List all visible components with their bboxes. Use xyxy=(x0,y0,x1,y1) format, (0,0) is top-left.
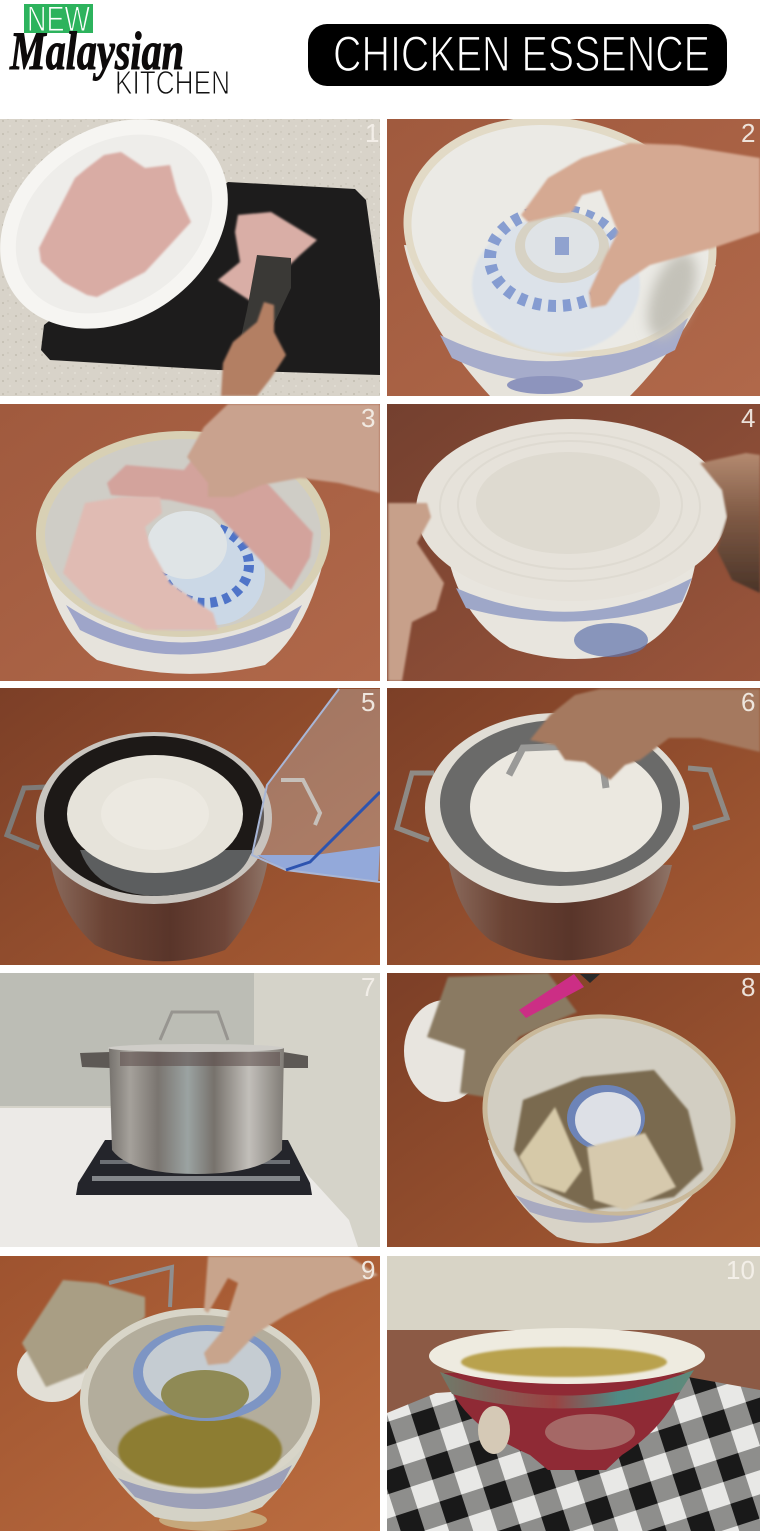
inverted small bowl xyxy=(567,1085,645,1151)
burner grate xyxy=(76,1140,312,1195)
bowl xyxy=(450,560,696,659)
medallion xyxy=(478,1406,510,1454)
panel: step 1: 1 xyxy=(365,118,379,148)
large bowl body xyxy=(404,245,716,396)
bowl xyxy=(444,1373,688,1470)
checkered cloth xyxy=(387,1377,760,1531)
panel: step 10: 10 xyxy=(726,1255,755,1285)
panel: step 6 xyxy=(387,687,760,965)
panel: step 7 xyxy=(0,972,380,1247)
panel: step 5: 5 xyxy=(361,687,375,717)
panel: step 4 xyxy=(387,403,760,681)
broth xyxy=(461,1347,667,1377)
plate xyxy=(470,742,662,872)
panel: step 2 xyxy=(387,119,760,396)
chicken upper xyxy=(107,457,313,590)
small inverted bowl xyxy=(472,217,640,353)
plate xyxy=(67,755,243,873)
panel: step 3 xyxy=(0,403,380,681)
panel: step 4: 4 xyxy=(741,403,755,433)
measuring jug xyxy=(252,689,380,880)
pot lid rim xyxy=(108,1044,284,1052)
bowl rim and interior xyxy=(36,431,330,637)
bowl body xyxy=(42,562,322,674)
pot body xyxy=(109,1048,284,1174)
panel: step 3: 3 xyxy=(361,403,375,433)
lid handle xyxy=(509,745,606,788)
rim xyxy=(429,1328,705,1384)
panel: step 5 xyxy=(0,687,380,965)
bowl rim and interior xyxy=(80,1308,320,1492)
tilted small bowl xyxy=(133,1325,281,1421)
plate xyxy=(404,1000,486,1102)
bowl rim and interior xyxy=(469,998,749,1232)
panel: step 8: 8 xyxy=(741,972,755,1002)
panel: step 6: 6 xyxy=(741,687,755,717)
bowl body xyxy=(85,1420,316,1522)
panel: step 2: 2 xyxy=(741,118,755,148)
shredded chicken xyxy=(22,1280,145,1387)
plate xyxy=(17,1342,87,1402)
logo: New Malaysian Kitchen: NEW xyxy=(27,0,90,39)
shreds in bowl xyxy=(514,1070,703,1210)
stove top xyxy=(0,1108,358,1247)
soup xyxy=(118,1412,282,1488)
hand xyxy=(221,302,286,396)
panel: step 10 xyxy=(387,1255,760,1531)
panel: step 9 xyxy=(0,1255,380,1531)
raw chicken on board xyxy=(218,212,317,302)
cork trivet xyxy=(159,1509,267,1531)
large bowl body xyxy=(488,1130,732,1243)
logo: New Malaysian Kitchen: KITCHEN xyxy=(115,64,230,101)
plate xyxy=(416,419,728,568)
cutting board xyxy=(41,182,380,375)
pink knife xyxy=(519,974,584,1018)
shredded chicken held up xyxy=(427,973,577,1097)
pot rim and interior xyxy=(36,732,272,904)
panel: step 1 xyxy=(0,119,380,396)
tongs xyxy=(109,1267,172,1307)
mallet xyxy=(242,255,291,336)
left hand xyxy=(388,503,444,681)
pot handles xyxy=(397,773,434,840)
bowl rim and interior xyxy=(404,119,716,357)
panel: step 7: 7 xyxy=(361,972,375,1002)
pot lid handle xyxy=(160,1012,228,1040)
chicken lower xyxy=(63,497,218,630)
cooked chicken xyxy=(519,1107,582,1193)
white plate xyxy=(0,119,228,329)
pot handles xyxy=(7,787,46,848)
pot body xyxy=(50,860,268,961)
panel: step 9: 9 xyxy=(361,1255,375,1285)
lid rim xyxy=(425,713,689,903)
glass lid xyxy=(440,720,680,886)
hand xyxy=(204,1256,378,1365)
bowl under plate xyxy=(80,850,252,896)
floral motif xyxy=(545,1414,635,1450)
right hand xyxy=(700,453,760,593)
hand xyxy=(187,404,380,497)
hand xyxy=(521,143,760,308)
logo: New Malaysian Kitchen xyxy=(9,0,230,101)
logo: New Malaysian Kitchen: Malaysian xyxy=(9,21,184,81)
panel: step 8 xyxy=(387,972,760,1247)
raw chicken on plate xyxy=(39,152,191,297)
bowl meander band xyxy=(440,1370,694,1409)
hand and arm xyxy=(530,689,760,780)
pot handles xyxy=(80,1052,110,1068)
pot body xyxy=(448,860,672,960)
small bowl xyxy=(165,525,265,625)
